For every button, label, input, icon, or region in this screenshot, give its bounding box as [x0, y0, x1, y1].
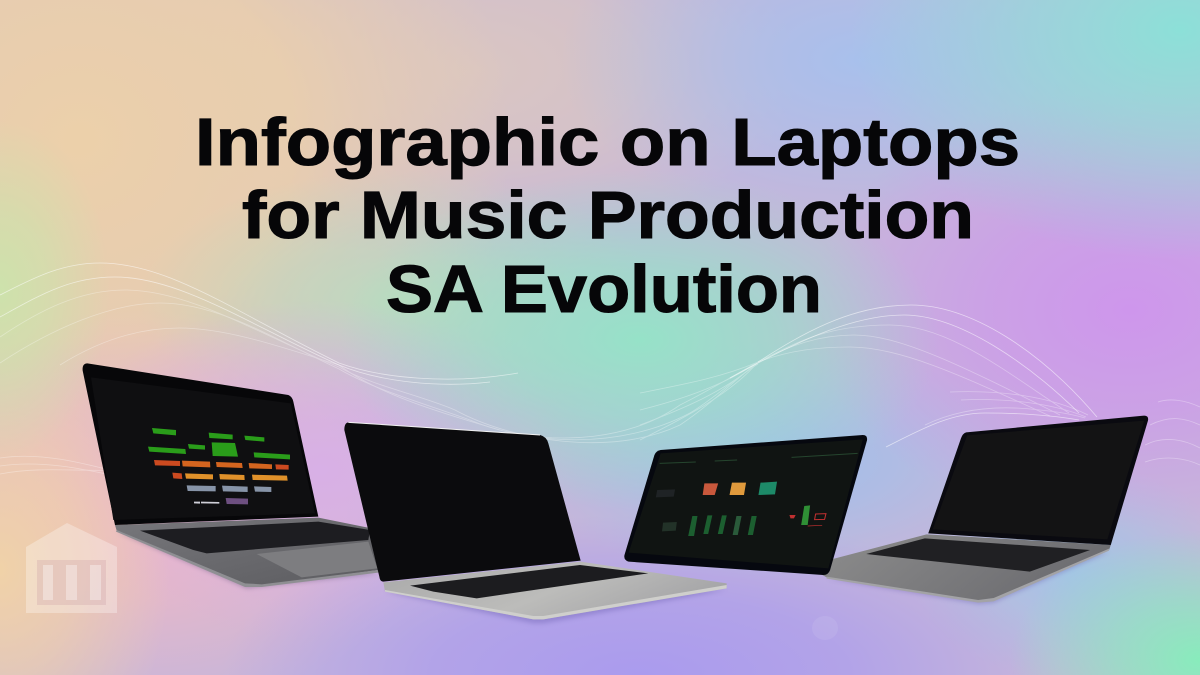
title: Infographic on Laptops — [195, 105, 1020, 180]
flowing white wave lines — [0, 263, 1200, 478]
laptop 4: grey with blank screen — [816, 416, 1148, 604]
screen: coloured tiles and green meters — [656, 453, 858, 536]
title: SA Evolution — [386, 252, 822, 327]
laptop 3: dashboard screen — [624, 435, 867, 575]
title: for Music Production — [242, 178, 974, 253]
laptop 2: silver with blank screen — [344, 422, 727, 623]
icon: watermark building logo — [26, 523, 117, 613]
laptop 1: dark grey with arrangement screen — [83, 363, 380, 588]
decorative soft blob — [812, 616, 838, 640]
title — [195, 105, 1020, 327]
screen: green, orange, blue and purple track blocks — [148, 428, 290, 504]
